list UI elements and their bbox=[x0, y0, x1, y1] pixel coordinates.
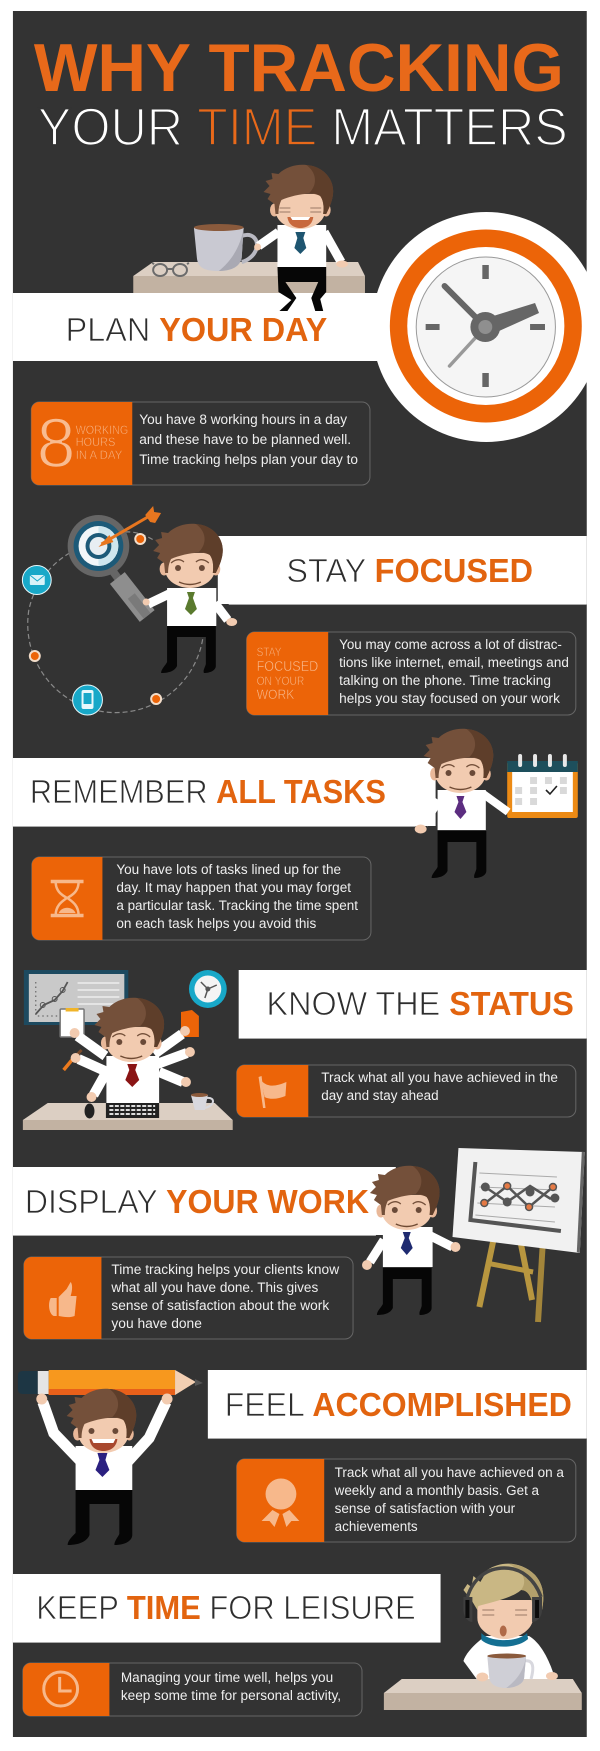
icon: wall clock bbox=[372, 200, 600, 450]
card: feel accomplished: weekly and a monthly basis. Get a bbox=[334, 1483, 540, 1498]
card: stay focused: ON YOUR bbox=[257, 676, 304, 688]
card: display your work: sense of satisfaction about the work bbox=[111, 1298, 330, 1313]
card: plan your day: HOURS bbox=[76, 437, 116, 449]
icon: award ribbon bbox=[262, 1478, 299, 1527]
heading: keep time for leisure: KEEP TIME FOR LEISURE bbox=[36, 1589, 416, 1626]
band: feel accomplished bbox=[208, 1370, 587, 1439]
card: keep time for leisure bbox=[23, 1663, 362, 1716]
band: remember all tasks bbox=[13, 758, 436, 827]
person: focused bbox=[143, 524, 237, 673]
card: feel accomplished: Track what all you have achieved on a bbox=[335, 1465, 564, 1480]
heading: feel accomplished: FEEL ACCOMPLISHED bbox=[225, 1386, 572, 1423]
card: plan your day: IN A DAY bbox=[76, 450, 123, 462]
heading: remember all tasks: REMEMBER ALL TASKS bbox=[30, 773, 386, 810]
card: display your work: you have done bbox=[111, 1316, 202, 1331]
card: stay focused: helps you stay focused on your work bbox=[339, 691, 560, 706]
card: plan your day: You have 8 working hours in a day bbox=[139, 412, 347, 427]
icon: orbit nodes bbox=[30, 534, 161, 704]
card: know the status bbox=[237, 1065, 576, 1117]
card: feel accomplished: achievements bbox=[335, 1519, 418, 1534]
diagram: dashed orbit, upper segment bbox=[29, 532, 155, 610]
band: keep time for leisure bbox=[13, 1574, 441, 1643]
chart board on easel bbox=[452, 1148, 585, 1253]
card: display your work bbox=[24, 1257, 353, 1339]
icon: desk with keyboard, mouse and cup bbox=[23, 1093, 233, 1130]
card: remember all tasks bbox=[32, 857, 371, 940]
band: stay focused bbox=[218, 536, 587, 605]
heading: plan your day: PLAN YOUR DAY bbox=[66, 311, 327, 348]
icon: clock bbox=[44, 1672, 78, 1706]
icon: wall chart board bbox=[24, 970, 128, 1025]
band: display your work bbox=[13, 1167, 396, 1236]
card: stay focused bbox=[247, 632, 576, 715]
card: stay focused: FOCUSED bbox=[257, 659, 318, 675]
icon: thumbs up bbox=[49, 1282, 77, 1317]
icon: small clock bbox=[189, 970, 227, 1008]
card: stay focused: WORK bbox=[257, 687, 294, 702]
section: display your work bbox=[13, 1148, 585, 1339]
person: presenting bbox=[362, 1166, 460, 1315]
icon: desk bbox=[384, 1679, 582, 1710]
card: keep time for leisure: Managing your time well, helps you bbox=[121, 1670, 333, 1685]
card: display your work: what all you have done. This gives bbox=[110, 1280, 319, 1295]
icon: coffee mug bbox=[194, 224, 257, 271]
title: WHY TRACKING bbox=[34, 31, 564, 106]
section: keep time for leisure bbox=[13, 1564, 582, 1716]
icon: glasses bbox=[152, 263, 189, 276]
heading: display your work: DISPLAY YOUR WORK bbox=[25, 1183, 369, 1220]
card: remember all tasks: a particular task. Tracking the time spent bbox=[116, 898, 358, 913]
card: plan your day: Time tracking helps plan your day to bbox=[139, 452, 358, 467]
diagram: dashed orbit, lower segment bbox=[28, 610, 203, 713]
icon: coffee cup bbox=[476, 1654, 558, 1688]
card: remember all tasks: You have lots of tasks lined up for the bbox=[116, 862, 341, 877]
icon: desk bbox=[133, 262, 365, 293]
card: remember all tasks: on each task helps you avoid this bbox=[116, 916, 317, 931]
card: keep time for leisure: keep some time for personal activity, bbox=[121, 1688, 341, 1703]
icon: hourglass bbox=[51, 882, 84, 916]
card: feel accomplished: sense of satisfaction with your bbox=[335, 1501, 516, 1516]
icon: mail bbox=[22, 566, 51, 594]
person: lifting pencil bbox=[36, 1389, 173, 1545]
person: holding calendar bbox=[415, 729, 508, 878]
band: plan your day bbox=[13, 293, 391, 361]
section: know the status bbox=[23, 970, 587, 1130]
card: stay focused: STAY bbox=[257, 647, 282, 659]
icon: magnifier target with arrow bbox=[68, 506, 161, 616]
section: stay focused bbox=[22, 506, 587, 715]
title bbox=[34, 31, 568, 157]
card: feel accomplished bbox=[237, 1459, 576, 1542]
card: plan your day bbox=[31, 402, 370, 485]
section: plan your day bbox=[13, 165, 600, 485]
card: stay focused: tions like internet, email, meetings and bbox=[339, 655, 569, 670]
heading: know the status: KNOW THE STATUS bbox=[267, 985, 574, 1022]
band: know the status bbox=[239, 970, 587, 1039]
icon: calendar bbox=[507, 756, 578, 818]
card: plan your day: and these have to be planned well. bbox=[139, 432, 351, 447]
section: remember all tasks bbox=[13, 729, 578, 940]
card: remember all tasks: day. It may happen that you may forget bbox=[116, 880, 351, 895]
icon: phone bbox=[73, 685, 102, 715]
person: laughing at desk bbox=[254, 165, 348, 311]
icon: easel bbox=[479, 1236, 543, 1322]
person: multitasking with six arms bbox=[60, 998, 199, 1104]
icon: flag bbox=[259, 1076, 286, 1108]
card: stay focused: talking on the phone. Time tracking bbox=[339, 673, 551, 688]
card: know the status: day and stay ahead bbox=[321, 1088, 439, 1103]
heading: stay focused: STAY FOCUSED bbox=[286, 552, 533, 589]
card: plan your day: WORKING bbox=[76, 425, 128, 437]
card: stay focused: You may come across a lot of distrac- bbox=[339, 637, 562, 652]
title: YOUR TIME MATTERS bbox=[38, 98, 568, 157]
card: know the status: Track what all you have achieved in the bbox=[321, 1070, 558, 1085]
icon: giant pencil bbox=[18, 1370, 203, 1395]
card: display your work: Time tracking helps your clients know bbox=[111, 1262, 339, 1277]
section: feel accomplished bbox=[18, 1370, 587, 1545]
person: relaxing with headphones bbox=[463, 1564, 553, 1680]
card: plan your day: 8 bbox=[37, 404, 76, 482]
